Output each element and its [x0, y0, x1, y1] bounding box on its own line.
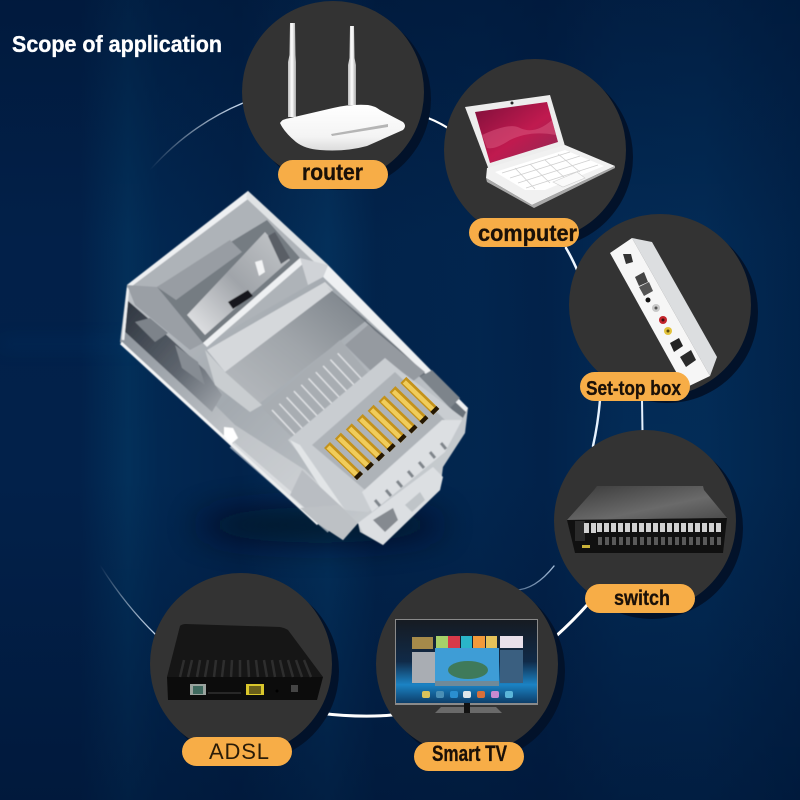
label: router: router: [302, 159, 363, 185]
gold contact pins: [327, 380, 436, 477]
label: set-top box: [580, 372, 690, 401]
connector shadow: [195, 507, 445, 543]
label: Smart TV: [414, 741, 524, 771]
label: computer: computer: [478, 220, 577, 246]
label: ADSL: [182, 737, 292, 766]
lower long face: [120, 325, 358, 540]
label: set-top box: Set-top box: [586, 378, 681, 400]
top latch block: [127, 191, 328, 343]
label: ADSL: ADSL: [209, 739, 269, 764]
label: router: [278, 159, 388, 189]
panel: router: [242, 1, 431, 190]
panel: ADSL: [150, 573, 339, 766]
connecting arcs: [100, 103, 642, 716]
icon: set-top box: [610, 238, 717, 388]
bottom tab: [358, 467, 443, 545]
title: Scope of application: [12, 31, 222, 57]
label: switch: switch: [614, 587, 670, 610]
panel: switch: [554, 430, 743, 619]
connector body: [120, 191, 468, 545]
icon: switch chassis: [567, 486, 727, 553]
icon: router: [280, 23, 405, 150]
label: switch: [585, 584, 695, 613]
right shoulder: [327, 287, 468, 420]
label: Smart TV: Smart TV: [432, 741, 507, 766]
RJ45 connector: [120, 191, 468, 545]
wire comb ridges: [262, 340, 376, 445]
recessed channel: [223, 287, 367, 403]
icon: ADSL modem: [167, 624, 323, 700]
panel: Smart TV: [376, 573, 565, 771]
icon: smart TV: [395, 619, 538, 713]
panel: computer: [444, 59, 633, 248]
icon: laptop: [465, 95, 615, 208]
contact area: [288, 358, 463, 512]
panel: set-top box: [569, 214, 758, 403]
